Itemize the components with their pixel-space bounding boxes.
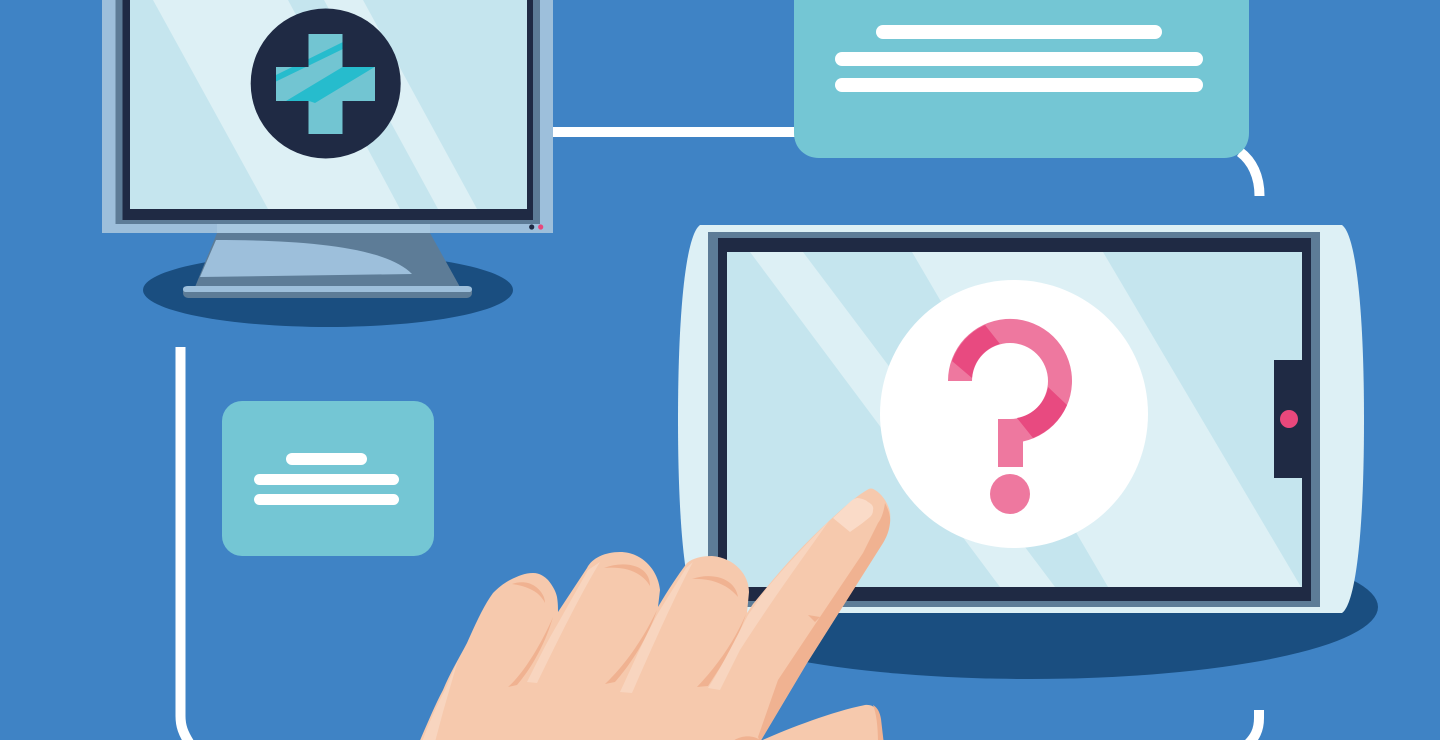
connector: top bubble to tablet [1240, 152, 1260, 196]
tablet camera [1274, 360, 1311, 478]
monitor base [183, 286, 472, 298]
hand pointing at the tablet [418, 488, 890, 740]
tablet body [678, 225, 1364, 613]
monitor bezel [102, 0, 553, 233]
finger highlights [422, 521, 829, 740]
tablet frame [708, 232, 1320, 607]
fingernail [833, 498, 873, 532]
connector: monitor to top bubble [550, 127, 800, 137]
connector: bottom right [1246, 710, 1259, 740]
tablet shadow [682, 535, 1378, 679]
icon: medical cross badge [251, 8, 401, 158]
monitor screen [130, 0, 527, 209]
tablet with question mark [678, 225, 1378, 679]
index finger shaded edge [758, 503, 890, 740]
knuckle [732, 736, 760, 740]
connector: left line to bottom [180, 347, 190, 740]
monitor stand [195, 233, 460, 287]
monitor inner frame [116, 0, 540, 224]
left speech bubble [222, 401, 434, 556]
tablet screen glare [750, 252, 1301, 587]
tablet screen [727, 252, 1302, 587]
thumb [750, 705, 884, 740]
monitor indicator lights [529, 224, 543, 230]
top speech bubble [794, 0, 1249, 158]
monitor shadow [143, 253, 513, 327]
icon: question mark badge [880, 280, 1148, 548]
monitor screen glare [153, 0, 477, 209]
hand and fingers [418, 488, 890, 740]
monitor with medical cross [102, 0, 553, 327]
fingertip creases [508, 564, 820, 687]
